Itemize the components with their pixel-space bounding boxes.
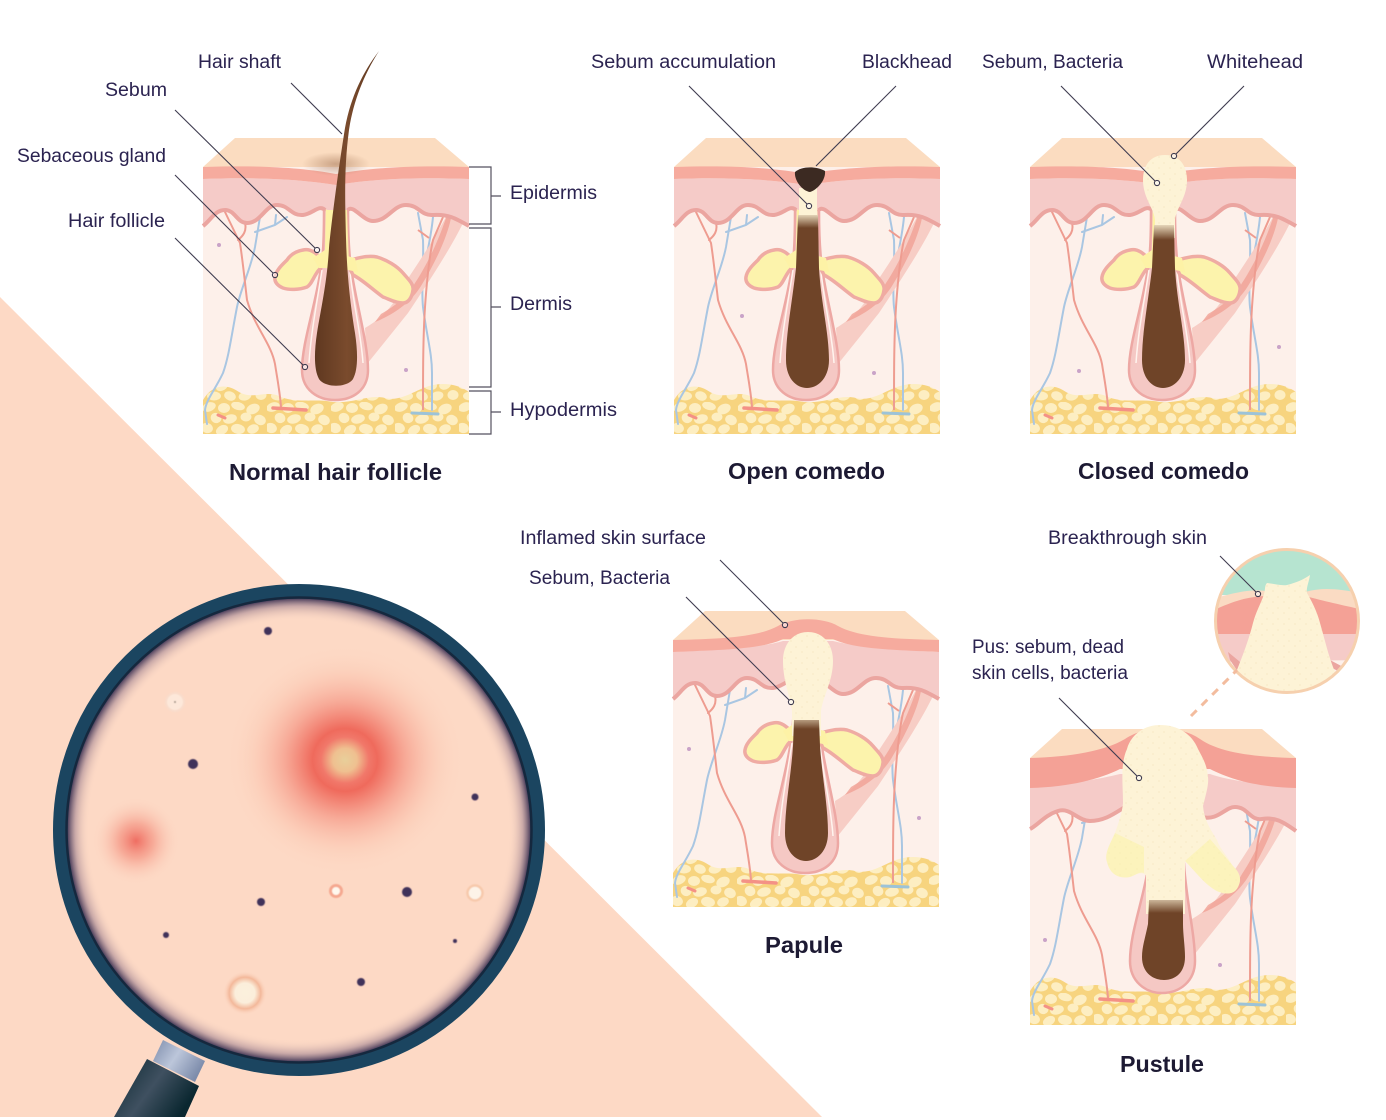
dashed connector [1191, 670, 1237, 716]
dermis specks [740, 314, 876, 375]
labels: papule and pustule: Sebum, Bacteria [529, 568, 670, 589]
layer brackets [469, 167, 501, 434]
panel: closed comedo [1030, 138, 1296, 434]
labels: papule and pustule: Breakthrough skin [1048, 528, 1207, 549]
sebum yellow tint [1106, 833, 1240, 894]
sebum blob [1143, 155, 1187, 238]
small inflamed spot [92, 797, 180, 885]
hair shaft and bulb [315, 51, 379, 386]
panel: pustule [1030, 725, 1296, 1025]
sebum column [799, 188, 817, 238]
inflamed epidermis [1030, 728, 1296, 831]
blackhead plug [795, 167, 825, 192]
inset: breakthrough skin [1214, 548, 1360, 694]
magnifier [60, 591, 538, 1117]
panel: normal hair follicle [203, 51, 469, 434]
handle collar [153, 1040, 205, 1082]
labels: normal hair follicle: Sebaceous gland [17, 146, 166, 167]
labels: normal hair follicle: Epidermis [510, 183, 597, 204]
labels: normal hair follicle: Hypodermis [510, 400, 617, 421]
hair bulb [785, 720, 828, 861]
labels: normal hair follicle [17, 52, 617, 421]
whitehead spots [166, 693, 482, 900]
dermis specks [687, 747, 921, 820]
labels: normal hair follicle: Hair follicle [68, 211, 165, 232]
lens rim [60, 591, 538, 1069]
panel titles [229, 458, 1249, 1077]
labels: comedones: Sebum accumulation [591, 52, 776, 73]
panel titles: Open comedo [728, 458, 885, 484]
labels: comedones [591, 52, 1303, 73]
dermis specks [1043, 938, 1222, 967]
lens [61, 592, 537, 1068]
panel: open comedo [674, 138, 940, 434]
leader lines [175, 83, 1256, 776]
lens rim inner line [66, 598, 532, 1062]
inflamed epidermis [673, 619, 939, 699]
labels: papule and pustule: Pus: sebum, dead [972, 637, 1124, 658]
panel titles: Pustule [1120, 1051, 1204, 1077]
hair bulb [1142, 225, 1185, 388]
panel titles: Normal hair follicle [229, 459, 442, 485]
hair bulb [786, 215, 829, 388]
sebum channel [325, 210, 349, 263]
labels: papule and pustule: skin cells, bacteria [972, 663, 1128, 684]
dermis specks [1077, 345, 1281, 373]
large inflamed spot [225, 644, 465, 876]
large whitehead [223, 971, 267, 1015]
labels: normal hair follicle: Sebum [105, 80, 167, 101]
labels: comedones: Whitehead [1207, 52, 1303, 73]
labels: normal hair follicle: Dermis [510, 294, 572, 315]
panel titles: Closed comedo [1078, 458, 1249, 484]
hair bulb [1142, 900, 1185, 980]
panel: papule [673, 611, 939, 907]
background peach triangle [0, 297, 822, 1117]
labels: papule and pustule: Inflamed skin surface [520, 528, 706, 549]
labels: comedones: Sebum, Bacteria [982, 52, 1123, 73]
sebum blob [783, 632, 833, 736]
labels: papule and pustule [520, 528, 1207, 684]
lens edge shadow [66, 597, 532, 1063]
follicle sheath [1130, 864, 1195, 993]
hair pore shadow [302, 152, 370, 176]
panel titles: Papule [765, 932, 843, 958]
dark blackhead spots [163, 627, 478, 986]
leader end markers [272, 153, 1261, 781]
labels: normal hair follicle: Hair shaft [198, 52, 282, 73]
dermis specks [217, 243, 408, 372]
labels: comedones: Blackhead [862, 52, 952, 73]
handle grip [114, 1059, 199, 1117]
pus blob [1106, 725, 1240, 914]
